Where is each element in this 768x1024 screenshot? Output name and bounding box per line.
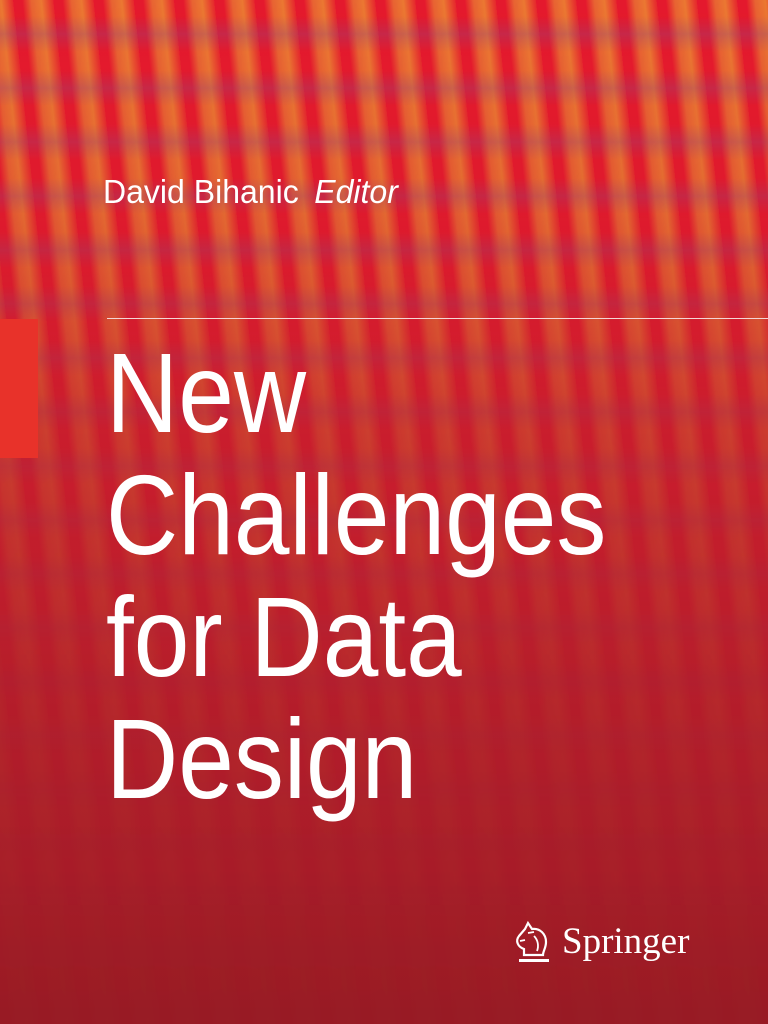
red accent block: [0, 319, 38, 458]
title: for Data: [106, 574, 462, 700]
background pattern: [0, 0, 768, 726]
title: New: [106, 330, 306, 456]
publisher logo: [516, 921, 690, 962]
title: Design: [106, 696, 417, 822]
title: Challenges: [106, 452, 606, 578]
author line: David Bihanic Editor: [103, 173, 398, 210]
publisher name: Springer: [562, 921, 689, 962]
title: [106, 330, 606, 822]
icon: knight: [516, 921, 549, 962]
